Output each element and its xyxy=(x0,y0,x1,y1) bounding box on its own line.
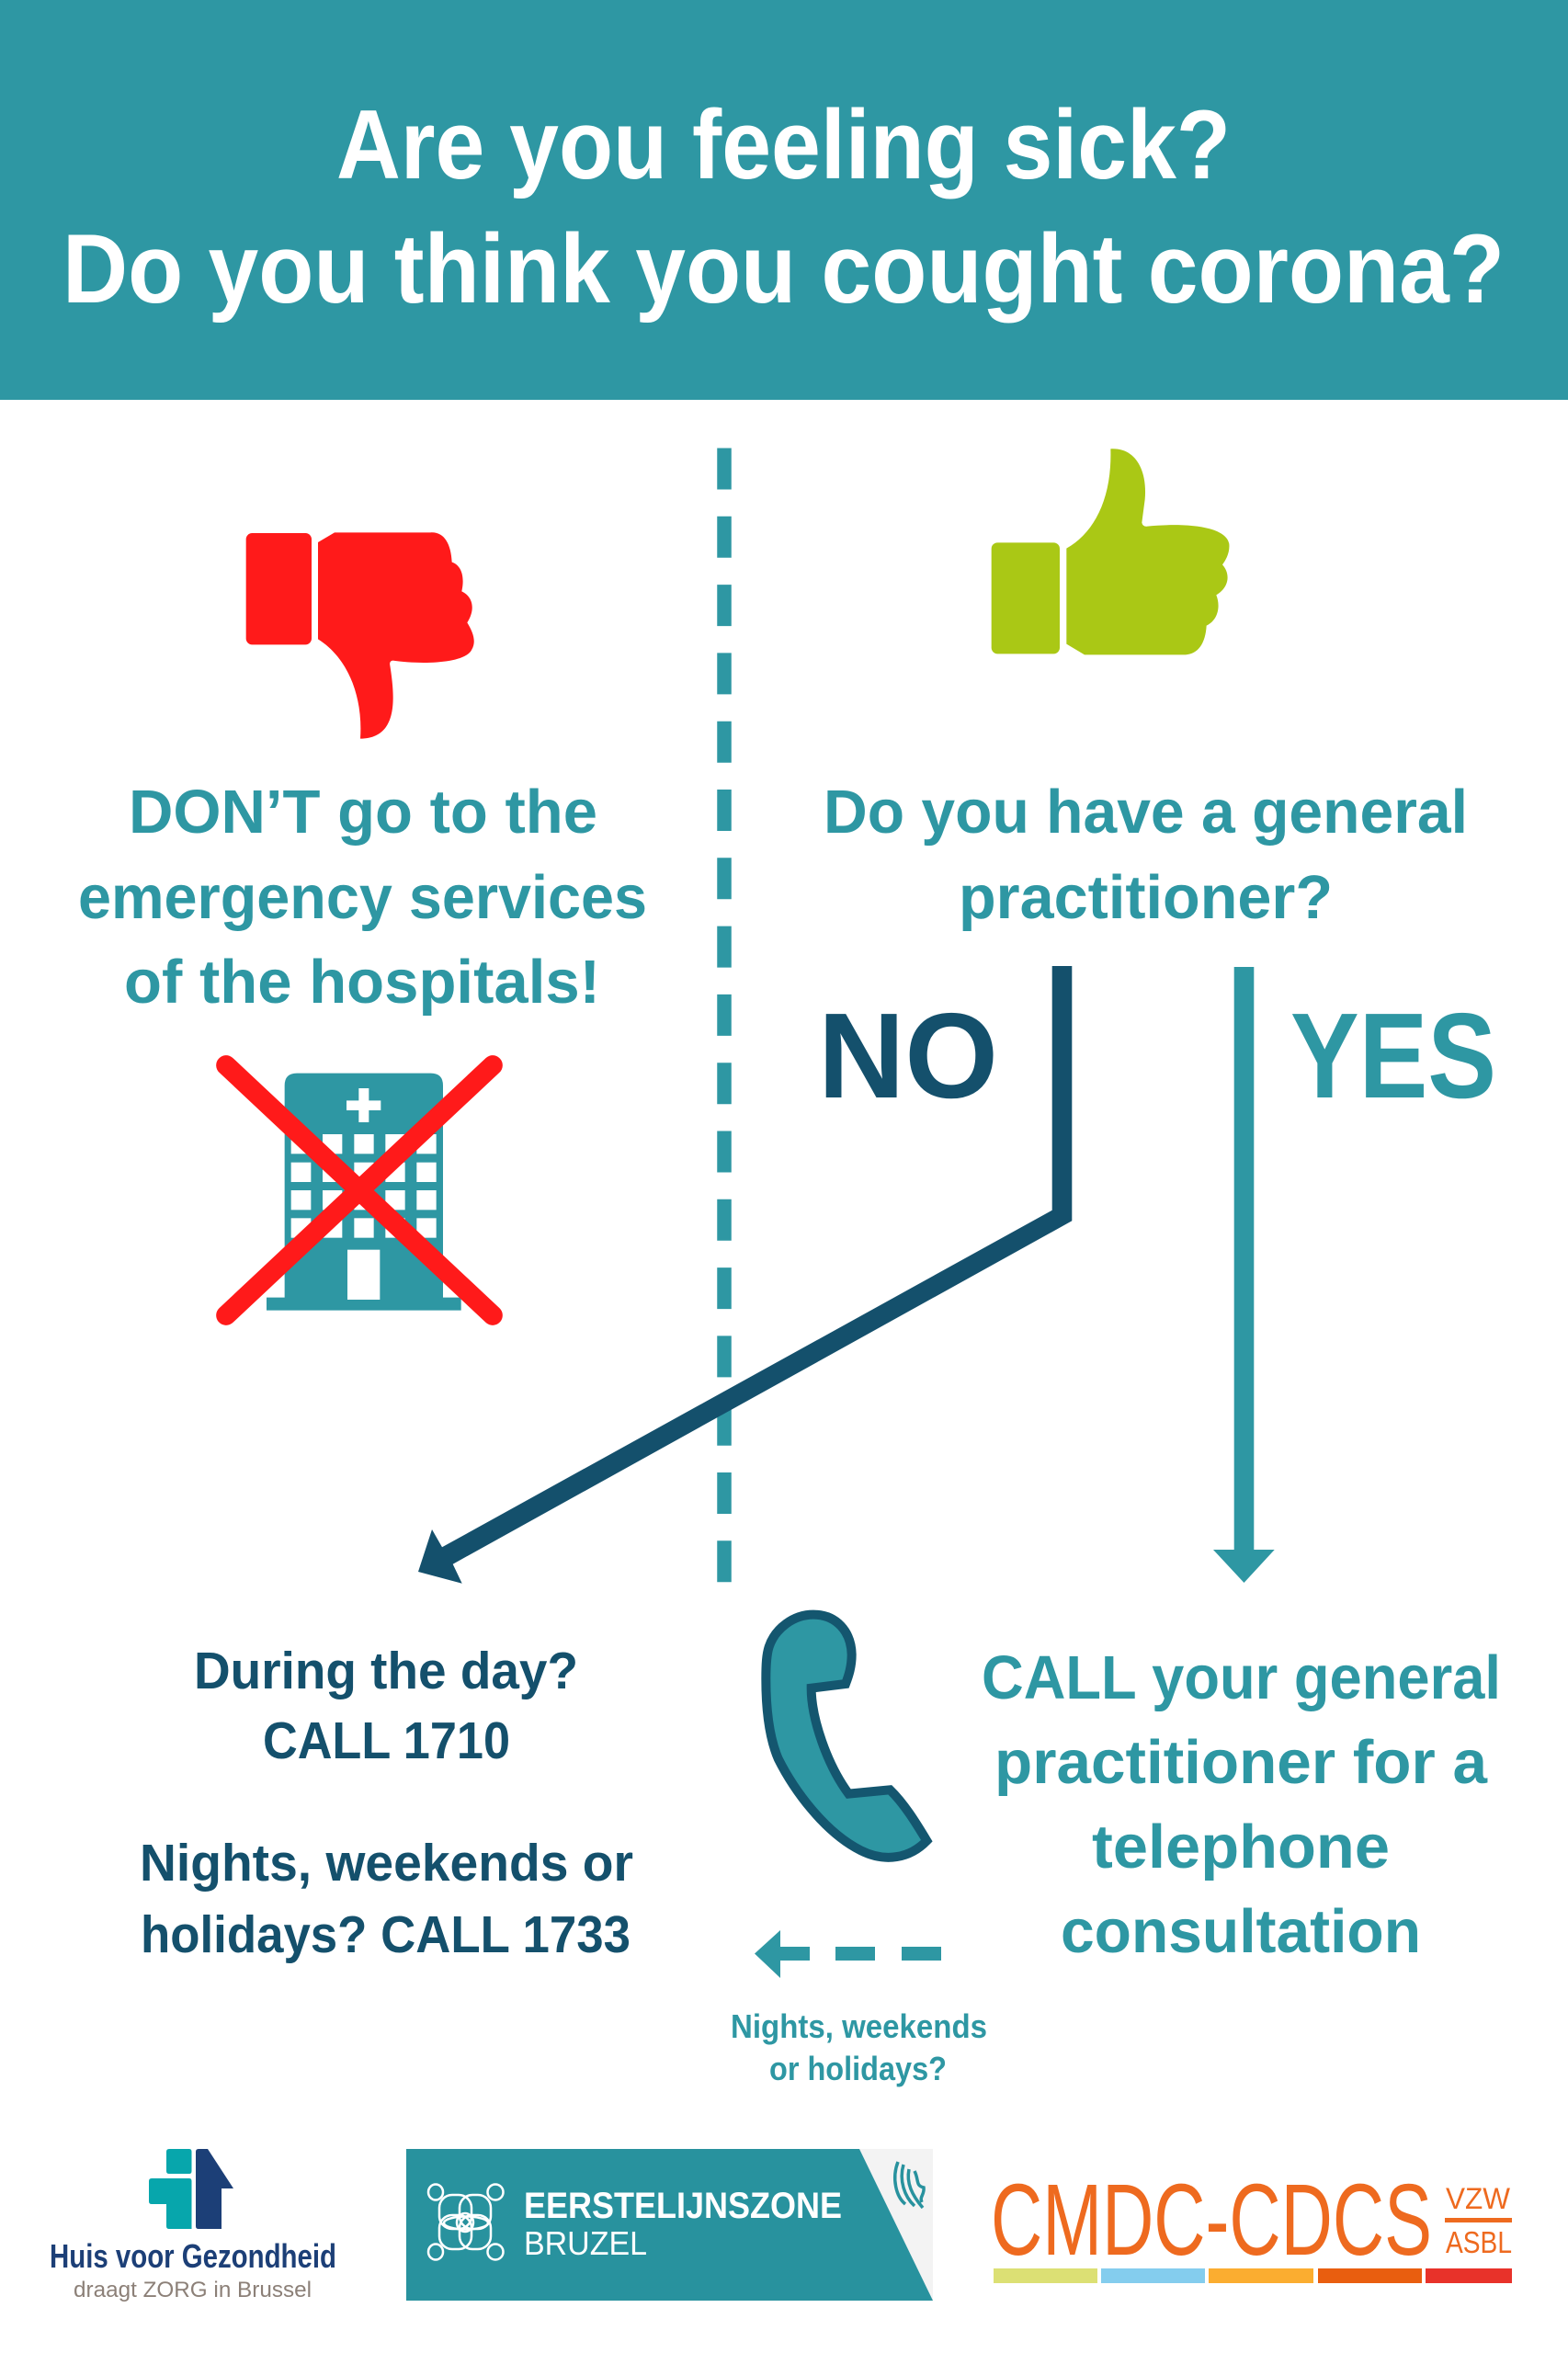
question: general practitioner: Do you have a general xyxy=(824,778,1468,847)
header banner xyxy=(0,0,1568,400)
question: general practitioner xyxy=(824,778,1468,932)
text: nights, weekends or holidays xyxy=(731,2007,987,2087)
icon: Flemish lion xyxy=(895,2162,924,2208)
text: nights, weekends or holidays: or holidays? xyxy=(769,2050,947,2087)
icon: thumbs up xyxy=(992,449,1229,654)
text: call your general practitioner: practitioner for a xyxy=(994,1728,1488,1797)
logo: Huis voor Gezondheid: draagt ZORG in Brussel xyxy=(74,2278,312,2302)
logo: CMDC-CDCS: ASBL xyxy=(1446,2225,1512,2259)
warning text: emergency services xyxy=(78,778,647,1017)
text: call your general practitioner xyxy=(982,1643,1501,1966)
icon: linked circles xyxy=(428,2184,504,2259)
text: who to call without a doctor: During the day? xyxy=(194,1642,578,1700)
text: call your general practitioner: telephone xyxy=(1092,1813,1390,1881)
arrow: YES downward xyxy=(1213,967,1275,1583)
arrow: dashed left xyxy=(755,1930,941,1978)
icon: telephone xyxy=(766,1615,926,1858)
arrow: NO to bottom left xyxy=(418,966,1072,1584)
question: general practitioner: practitioner? xyxy=(959,863,1333,932)
dashed divider xyxy=(717,449,732,1583)
logo: Eerstelijnszone Bruzel: EERSTELIJNSZONE xyxy=(524,2186,842,2226)
warning text: emergency services: of the hospitals! xyxy=(124,948,600,1017)
title: Are you feeling sick? xyxy=(336,89,1231,199)
logo: Huis voor Gezondheid xyxy=(50,2149,336,2302)
text: who to call without a doctor: Nights, weekends or xyxy=(140,1834,633,1893)
text: who to call without a doctor: CALL 1710 xyxy=(263,1711,510,1770)
label: YES: YES xyxy=(1290,988,1496,1123)
warning text: emergency services: emergency services xyxy=(78,863,647,932)
text: who to call without a doctor: holidays? CALL 1733 xyxy=(141,1905,631,1964)
label: NO: NO xyxy=(818,988,998,1123)
warning text: emergency services: DON’T go to the xyxy=(129,778,597,847)
logo: Eerstelijnszone Bruzel: BRUZEL xyxy=(524,2224,647,2262)
icon: thumbs down xyxy=(246,532,474,739)
text: call your general practitioner: consultation xyxy=(1061,1897,1421,1966)
text: call your general practitioner: CALL your general xyxy=(982,1643,1501,1712)
logo: CMDC-CDCS: VZW xyxy=(1446,2182,1511,2215)
logo: Eerstelijnszone Bruzel xyxy=(406,2149,933,2301)
logo: Huis voor Gezondheid: Huis voor Gezondheid xyxy=(50,2237,336,2275)
text: nights, weekends or holidays: Nights, weekends xyxy=(731,2007,987,2045)
text: who to call without a doctor xyxy=(140,1642,633,1964)
title xyxy=(62,89,1505,324)
icon: crossed out hospital xyxy=(226,1065,493,1315)
